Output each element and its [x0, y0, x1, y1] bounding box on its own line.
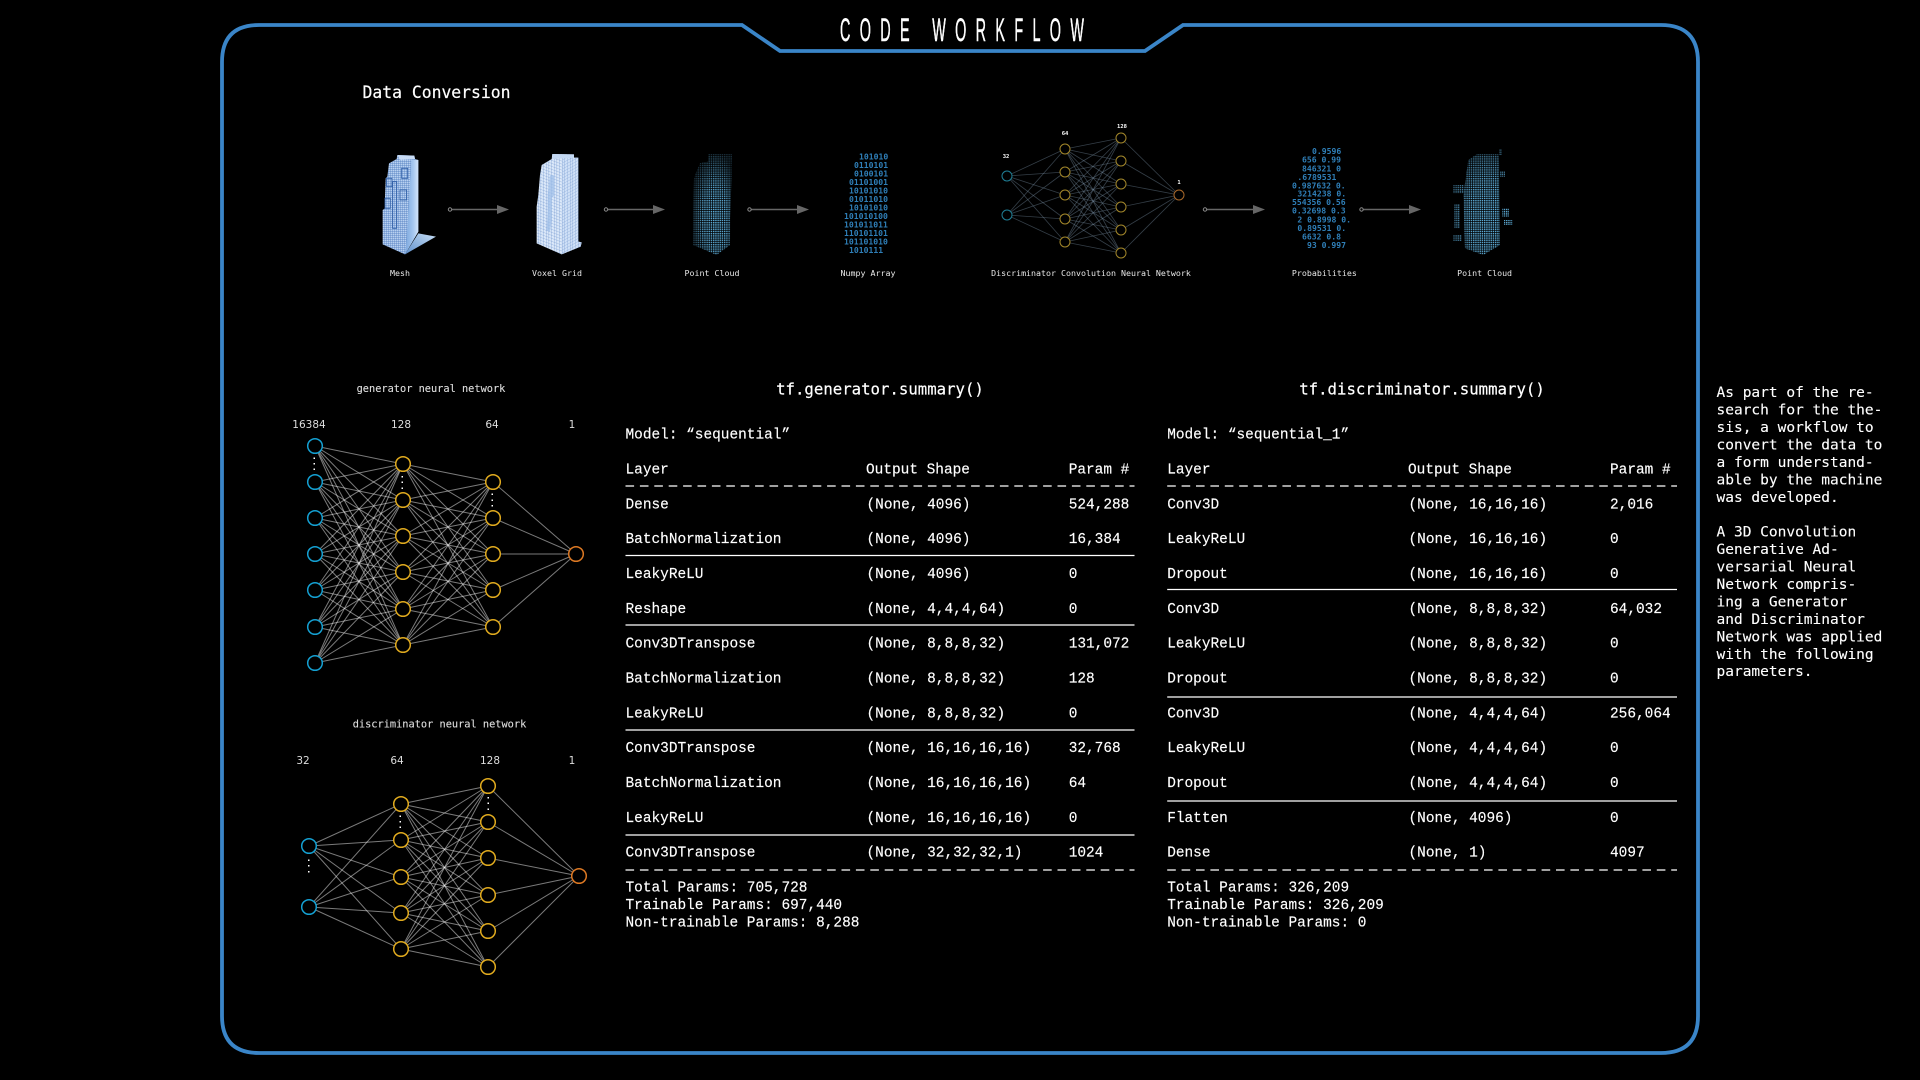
discriminator layer rows: (None, 8,8,8,32): [1408, 637, 1547, 653]
generator column headers: Param #: [1069, 462, 1130, 478]
mini discriminator network: 64: [1062, 131, 1069, 137]
discriminator layer rows: (None, 4,4,4,64): [1408, 706, 1547, 722]
probabilities digits: 0.987632 0.: [1292, 181, 1346, 191]
generator layer rows: 128: [1069, 672, 1095, 688]
numpy array digits: 01101001: [849, 177, 888, 187]
generator connections: [315, 446, 576, 663]
probabilities digits: 846321 0: [1302, 163, 1341, 173]
numpy array digits: 1010111: [849, 245, 883, 255]
arrow 3: [748, 205, 809, 214]
numpy array digits: 10101010: [849, 186, 888, 196]
generator layer rows: (None, 32,32,32,1): [866, 846, 1022, 862]
caption: mesh: Mesh: [390, 268, 410, 278]
generator model name: Model: “sequential”: [626, 428, 790, 444]
mini discriminator network: 128: [1117, 124, 1127, 130]
numpy array digits: 110101101: [844, 228, 888, 238]
probabilities digits: 656 0.99: [1302, 155, 1341, 165]
side description text: sis, a workflow to: [1716, 420, 1874, 436]
probabilities digits: .6789531: [1297, 172, 1337, 182]
generator nodes: [308, 439, 583, 670]
numpy array digits: 101011011: [844, 220, 888, 230]
probabilities digits: 554356 0.56: [1292, 197, 1346, 207]
generator layer rows: Conv3DTranspose: [626, 637, 755, 653]
discriminator neural network diagram: [296, 718, 586, 974]
discriminator layer sizes: 128: [480, 755, 500, 767]
generator table rules: [626, 486, 1134, 870]
discriminator layer rows: (None, 4,4,4,64): [1408, 776, 1547, 792]
side description text: ing a Generator: [1716, 594, 1848, 610]
side description text: A 3D Convolution: [1716, 525, 1856, 541]
discriminator model name: Model: “sequential_1”: [1167, 428, 1349, 444]
discriminator layer rows: [1167, 497, 1671, 862]
discriminator totals: [1167, 881, 1384, 931]
discriminator column headers: Param #: [1610, 462, 1671, 478]
discriminator layer rows: 0: [1610, 776, 1619, 792]
generator totals: [626, 881, 859, 931]
caption: point cloud: Point Cloud: [685, 268, 739, 278]
generator layer rows: (None, 8,8,8,32): [866, 672, 1005, 688]
generator column headers: Output Shape: [866, 462, 970, 478]
side description text: and Discriminator: [1716, 612, 1865, 628]
probabilities digits: 0.89531 0.: [1297, 223, 1346, 233]
side description text: Network compris-: [1716, 577, 1856, 593]
generator layer rows: Reshape: [626, 602, 686, 618]
discriminator layer rows: (None, 8,8,8,32): [1408, 602, 1547, 618]
discriminator layer rows: 0: [1610, 672, 1619, 688]
outer frame with title notch: [222, 25, 1698, 1053]
generator layer rows: LeakyReLU: [626, 811, 703, 827]
generator layer rows: 131,072: [1069, 637, 1129, 653]
discriminator layer sizes: [296, 755, 575, 767]
discriminator layer rows: 256,064: [1610, 706, 1671, 722]
discriminator layer sizes: 32: [296, 755, 310, 767]
probabilities digits: 6632 0.8: [1302, 232, 1341, 242]
numpy array digits: 0100101: [854, 168, 888, 178]
discriminator layer rows: (None, 16,16,16): [1408, 532, 1547, 548]
arrow 4: [1203, 205, 1265, 214]
generator layer rows: 0: [1069, 567, 1077, 583]
generator layer sizes: 128: [391, 419, 411, 431]
generator title: generator neural network: [357, 383, 506, 395]
mini discriminator network: 32: [1003, 154, 1009, 160]
numpy array digits: 101010: [859, 152, 888, 162]
discriminator layer sizes: 64: [390, 755, 404, 767]
generator layer rows: (None, 4096): [866, 532, 970, 548]
discriminator layer rows: 4097: [1610, 846, 1645, 862]
generator layer rows: BatchNormalization: [626, 672, 781, 688]
probabilities digits: 0.32698 0.3: [1292, 206, 1346, 216]
generator layer rows: (None, 4,4,4,64): [866, 602, 1005, 618]
numpy array digits: 01011010: [849, 194, 888, 204]
generator layer rows: (None, 16,16,16,16): [866, 776, 1031, 792]
generator layer rows: 0: [1069, 811, 1077, 827]
caption: point cloud output: Point Cloud: [1457, 268, 1512, 278]
discriminator layer rows: (None, 4,4,4,64): [1408, 741, 1547, 757]
generator layer rows: Conv3DTranspose: [626, 846, 755, 862]
side description text: Generative Ad-: [1716, 542, 1839, 558]
generator table heading: tf.generator.summary(): [776, 380, 984, 398]
generator layer rows: (None, 4096): [866, 567, 970, 583]
side description text: [1716, 385, 1882, 680]
discriminator layer rows: Conv3D: [1167, 497, 1219, 513]
discriminator layer rows: (None, 8,8,8,32): [1408, 672, 1547, 688]
discriminator layer rows: 64,032: [1610, 602, 1662, 618]
generator layer sizes: 64: [485, 419, 499, 431]
arrow 5: [1360, 205, 1421, 214]
side description text: parameters.: [1716, 664, 1813, 680]
numpy array digits: 10101010: [849, 202, 888, 212]
discriminator layer rows: Dropout: [1167, 567, 1228, 583]
discriminator layer rows: Flatten: [1167, 811, 1228, 827]
discriminator layer rows: 2,016: [1610, 497, 1653, 513]
discriminator totals: Non-trainable Params: 0: [1167, 915, 1366, 931]
probabilities digits: 3214238 0.: [1297, 188, 1346, 198]
generator layer sizes: 1: [569, 419, 575, 431]
discriminator table heading: tf.discriminator.summary(): [1299, 380, 1545, 398]
generator layer rows: 0: [1069, 602, 1077, 618]
discriminator column headers: [1167, 462, 1671, 478]
discriminator layer rows: Dropout: [1167, 776, 1228, 792]
discriminator summary table: [1167, 380, 1677, 931]
generator layer rows: (None, 8,8,8,32): [866, 637, 1005, 653]
probabilities digits: 0.9596: [1312, 146, 1341, 156]
discriminator layer rows: 0: [1610, 811, 1619, 827]
arrow 1: [448, 205, 509, 214]
generator layer rows: (None, 4096): [866, 497, 970, 513]
discriminator layer rows: 0: [1610, 532, 1619, 548]
generator totals: Non-trainable Params: 8,288: [626, 915, 859, 931]
section heading: data conversion: Data Conversion: [362, 83, 511, 102]
generator column headers: Layer: [626, 462, 669, 478]
discriminator layer rows: Dropout: [1167, 672, 1228, 688]
generator totals: Total Params: 705,728: [626, 881, 807, 897]
icon: point cloud output: [1453, 149, 1513, 255]
generator summary table: [626, 380, 1134, 931]
discriminator layer sizes: 1: [569, 755, 575, 767]
title: CODE WORKFLOW: [840, 14, 1084, 49]
icon: mesh building: [383, 155, 436, 254]
generator layer rows: LeakyReLU: [626, 567, 703, 583]
numpy array digits: 101101010: [844, 236, 888, 246]
generator layer rows: (None, 16,16,16,16): [866, 741, 1031, 757]
generator layer rows: BatchNormalization: [626, 776, 781, 792]
generator layer rows: (None, 16,16,16,16): [866, 811, 1031, 827]
generator layer sizes: [292, 419, 575, 431]
discriminator table rules: [1167, 486, 1677, 870]
generator layer rows: [626, 497, 1129, 862]
discriminator layer rows: (None, 4096): [1408, 811, 1512, 827]
generator layer rows: 1024: [1069, 846, 1103, 862]
discriminator layer rows: Dense: [1167, 846, 1211, 862]
icon: voxel grid building: [537, 154, 582, 254]
generator layer rows: Dense: [626, 497, 669, 513]
side description text: versarial Neural: [1716, 560, 1856, 576]
numpy array digits: 0110101: [854, 160, 888, 170]
generator column headers: [626, 462, 1130, 478]
discriminator totals: Total Params: 326,209: [1167, 881, 1349, 897]
discriminator totals: Trainable Params: 326,209: [1167, 898, 1384, 914]
mini discriminator network: [1002, 124, 1184, 258]
numpy array digits: 101010100: [844, 211, 888, 221]
arrow 2: [604, 205, 665, 214]
side description text: was developed.: [1716, 490, 1839, 506]
side description text: convert the data to: [1716, 438, 1882, 454]
probabilities digits: [1292, 146, 1351, 250]
discriminator layer rows: 0: [1610, 567, 1619, 583]
caption: voxel grid: Voxel Grid: [532, 268, 582, 278]
generator layer rows: 32,768: [1069, 741, 1121, 757]
discriminator connections: [309, 786, 579, 967]
discriminator layer rows: LeakyReLU: [1167, 741, 1245, 757]
generator layer rows: 64: [1069, 776, 1086, 792]
discriminator layer rows: (None, 16,16,16): [1408, 497, 1547, 513]
numpy array digits: [844, 152, 888, 255]
side description text: search for the the-: [1716, 403, 1882, 419]
generator layer rows: (None, 8,8,8,32): [866, 706, 1005, 722]
discriminator layer rows: (None, 1): [1408, 846, 1486, 862]
generator layer rows: 0: [1069, 706, 1077, 722]
caption: discriminator cnn: Discriminator Convolution Neural Network: [991, 268, 1191, 278]
discriminator column headers: Layer: [1167, 462, 1211, 478]
side description text: As part of the re-: [1716, 385, 1874, 401]
side description text: able by the machine: [1716, 472, 1882, 488]
discriminator layer rows: 0: [1610, 741, 1619, 757]
data conversion pipeline: [383, 124, 1513, 278]
generator neural network diagram: [292, 383, 583, 670]
side description text: with the following: [1716, 647, 1874, 663]
caption: probabilities: Probabilities: [1292, 268, 1357, 278]
side description text: Network was applied: [1716, 629, 1882, 645]
generator totals: Trainable Params: 697,440: [626, 898, 842, 914]
discriminator title: discriminator neural network: [353, 718, 527, 730]
generator layer rows: LeakyReLU: [626, 706, 703, 722]
side description text: a form understand-: [1716, 455, 1874, 471]
discriminator layer rows: (None, 16,16,16): [1408, 567, 1547, 583]
discriminator layer rows: Conv3D: [1167, 602, 1219, 618]
mini discriminator network: 1: [1177, 180, 1181, 186]
icon: point cloud: [693, 154, 732, 255]
generator layer sizes: 16384: [292, 419, 326, 431]
caption: numpy array: Numpy Array: [841, 268, 895, 278]
discriminator layer rows: Conv3D: [1167, 706, 1219, 722]
generator layer rows: BatchNormalization: [626, 532, 781, 548]
discriminator layer rows: 0: [1610, 637, 1619, 653]
generator layer rows: Conv3DTranspose: [626, 741, 755, 757]
generator layer rows: 16,384: [1069, 532, 1121, 548]
discriminator layer rows: LeakyReLU: [1167, 532, 1245, 548]
generator layer rows: 524,288: [1069, 497, 1129, 513]
discriminator nodes: [302, 779, 586, 974]
probabilities digits: 2 0.8998 0.: [1297, 214, 1351, 224]
probabilities digits: 93 0.997: [1307, 240, 1346, 250]
discriminator layer rows: LeakyReLU: [1167, 637, 1245, 653]
discriminator column headers: Output Shape: [1408, 462, 1512, 478]
